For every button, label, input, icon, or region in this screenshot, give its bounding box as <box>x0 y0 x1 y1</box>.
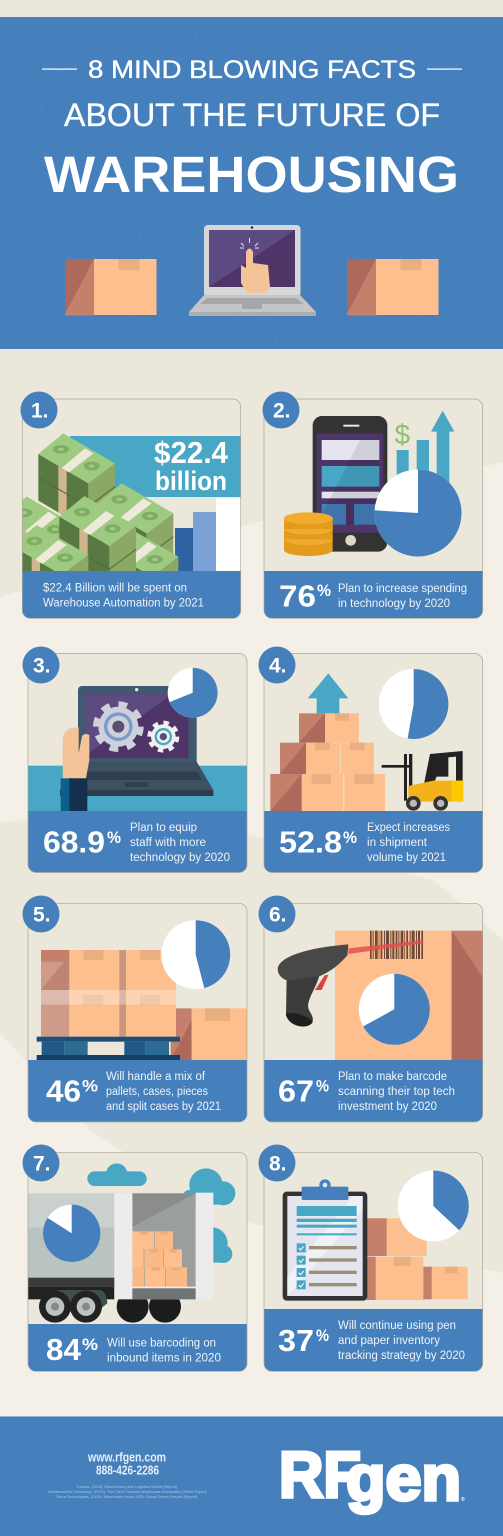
stat: billion: billion <box>155 466 227 496</box>
icon: left box <box>65 259 156 316</box>
logo: RFgen: ® <box>461 1496 465 1503</box>
panel: fact 5 <box>28 903 248 1122</box>
caption panel: in technology by 2020 <box>338 598 450 610</box>
icon: forklift <box>382 751 463 811</box>
caption panel: 67 <box>278 1074 314 1109</box>
badge 4 <box>258 646 296 684</box>
card outline 4 <box>264 654 483 872</box>
background light band <box>0 462 503 1416</box>
caption panel <box>264 811 483 873</box>
pie chart: 67% <box>359 974 430 1045</box>
caption panel: investment by 2020 <box>338 1101 437 1113</box>
badge 7: 7. <box>33 1152 51 1176</box>
title line 1: 8 MIND BLOWING FACTS <box>88 56 416 84</box>
icon: money stacks <box>2 433 178 623</box>
stat: $22.4: $22.4 <box>154 435 229 470</box>
caption panel: Warehouse Automation by 2021 <box>43 598 204 610</box>
caption panel: % <box>317 581 331 600</box>
card outline 7 <box>28 1152 247 1371</box>
logo: RFgen <box>279 1438 465 1514</box>
caption panel: in shipment <box>367 837 428 849</box>
badge 5 <box>22 896 60 932</box>
icon: phone, coins and growth chart <box>284 411 454 556</box>
caption panel: Plan to equip <box>130 822 197 834</box>
badge 5: 5. <box>33 904 51 926</box>
caption panel: 37 <box>278 1323 314 1358</box>
badge 8 <box>258 1144 296 1182</box>
caption panel <box>28 811 247 873</box>
sources: Tractica. (2019). Warehousing and Logistics Robots [Report]. <box>76 1484 178 1489</box>
caption panel: Will continue using pen <box>338 1320 456 1332</box>
caption panel: % <box>82 1077 98 1096</box>
caption panel: scanning their top tech <box>338 1086 455 1098</box>
icon: wrapped pallet and box <box>37 950 248 1060</box>
caption panel: % <box>316 1326 329 1345</box>
panel: fact 1 <box>22 434 240 618</box>
caption panel: tracking strategy by 2020 <box>338 1350 465 1362</box>
sources <box>48 1484 207 1499</box>
title line 2: ABOUT THE FUTURE OF <box>64 97 440 133</box>
title rule right <box>427 68 462 70</box>
pie chart: 76% <box>374 470 462 556</box>
caption panel <box>264 1060 483 1122</box>
badge 6: 6. <box>269 904 287 926</box>
badge 1 <box>20 392 58 428</box>
title line 3: WAREHOUSING <box>44 146 459 203</box>
caption panel: 68.9 <box>43 825 105 860</box>
badge 6 <box>258 896 296 932</box>
caption panel <box>264 1309 483 1372</box>
caption panel <box>22 571 241 619</box>
icon: delivery truck with boxes <box>28 1193 213 1323</box>
badge 3: 3. <box>33 654 51 678</box>
icon: laptop with gears and hand <box>28 686 248 811</box>
card outline 6 <box>264 903 483 1122</box>
icon: boxes <box>367 1218 468 1300</box>
badge 1: 1. <box>31 400 49 422</box>
caption panel: and paper inventory <box>338 1335 440 1347</box>
panel: fact 7 <box>28 1152 247 1372</box>
pie chart: 68.9% <box>168 668 218 718</box>
panel: fact 6 <box>264 903 483 1122</box>
icon: phone, coins and growth chart: $ <box>395 419 411 450</box>
badge 7 <box>22 1144 60 1182</box>
panel: fact 4 <box>264 654 483 873</box>
card outline 1 <box>22 399 241 618</box>
phone number: 888-426-2286 <box>96 1464 159 1478</box>
sources: Westernacher Consulting. (2015). The Trend Towards Warehouse Automation [White Paper]. <box>48 1489 207 1494</box>
caption panel: volume by 2021 <box>367 852 446 864</box>
badge 2: 2. <box>273 400 291 422</box>
logo: RFgen: RF <box>279 1438 361 1511</box>
caption panel: Will handle a mix of <box>106 1071 206 1083</box>
badge 2 <box>262 392 300 428</box>
footer <box>0 1416 503 1536</box>
bar chart <box>175 498 241 571</box>
logo: RFgen: gen <box>346 1442 461 1514</box>
panel: fact 8 <box>264 1152 483 1372</box>
caption panel: % <box>82 1335 98 1354</box>
caption panel: % <box>107 828 121 847</box>
caption panel <box>264 571 483 619</box>
caption panel: 76 <box>279 579 316 614</box>
icon: barcode scanner and box <box>278 931 483 1060</box>
title rule left <box>42 68 77 70</box>
card outline 3 <box>28 654 247 872</box>
pie chart: 84% <box>43 1205 100 1262</box>
caption panel: $22.4 Billion will be spent on <box>43 583 187 595</box>
caption panel: 46 <box>46 1074 81 1109</box>
icon: laptop with pointing hand <box>189 225 316 316</box>
caption panel: Plan to increase spending <box>338 583 467 595</box>
caption panel: % <box>316 1077 329 1096</box>
panel: fact 3 <box>28 654 248 873</box>
icon: clipboard checklist <box>283 1179 367 1301</box>
caption panel: Plan to make barcode <box>338 1071 447 1083</box>
caption panel: % <box>343 828 357 847</box>
caption panel: and split cases by 2021 <box>106 1101 221 1113</box>
caption panel <box>28 1324 247 1372</box>
icon: clouds <box>87 1163 235 1263</box>
badge 4: 4. <box>269 654 287 678</box>
badge 8: 8. <box>269 1152 287 1176</box>
icon: right box <box>347 259 438 316</box>
panel: fact 2 <box>264 399 483 619</box>
caption panel: Expect increases <box>367 822 450 834</box>
caption panel: technology by 2020 <box>130 852 230 864</box>
caption panel: inbound items in 2020 <box>107 1353 221 1365</box>
caption panel: pallets, cases, pieces <box>106 1086 208 1098</box>
caption panel <box>28 1060 247 1122</box>
website: www.rfgen.com <box>87 1450 166 1465</box>
card outline 2 <box>264 399 483 618</box>
card outline 8 <box>264 1152 483 1371</box>
header banner <box>0 9 503 366</box>
caption panel: Will use barcoding on <box>107 1338 216 1350</box>
pie chart: 37% <box>398 1170 469 1242</box>
caption panel: 52.8 <box>279 825 342 860</box>
pie chart: 52.8% <box>379 669 449 739</box>
card outline 5 <box>28 903 247 1122</box>
sources: Zebra Technologies. (2015). Warehouse Vision 2020: Global Survey Results [Report]. <box>56 1494 198 1499</box>
caption panel: staff with more <box>130 837 206 849</box>
caption panel: 84 <box>46 1332 82 1367</box>
teal banner <box>70 436 241 497</box>
icon: box pyramid with arrow <box>270 673 385 811</box>
pie chart: 46% <box>161 920 230 989</box>
badge 3 <box>22 646 60 684</box>
